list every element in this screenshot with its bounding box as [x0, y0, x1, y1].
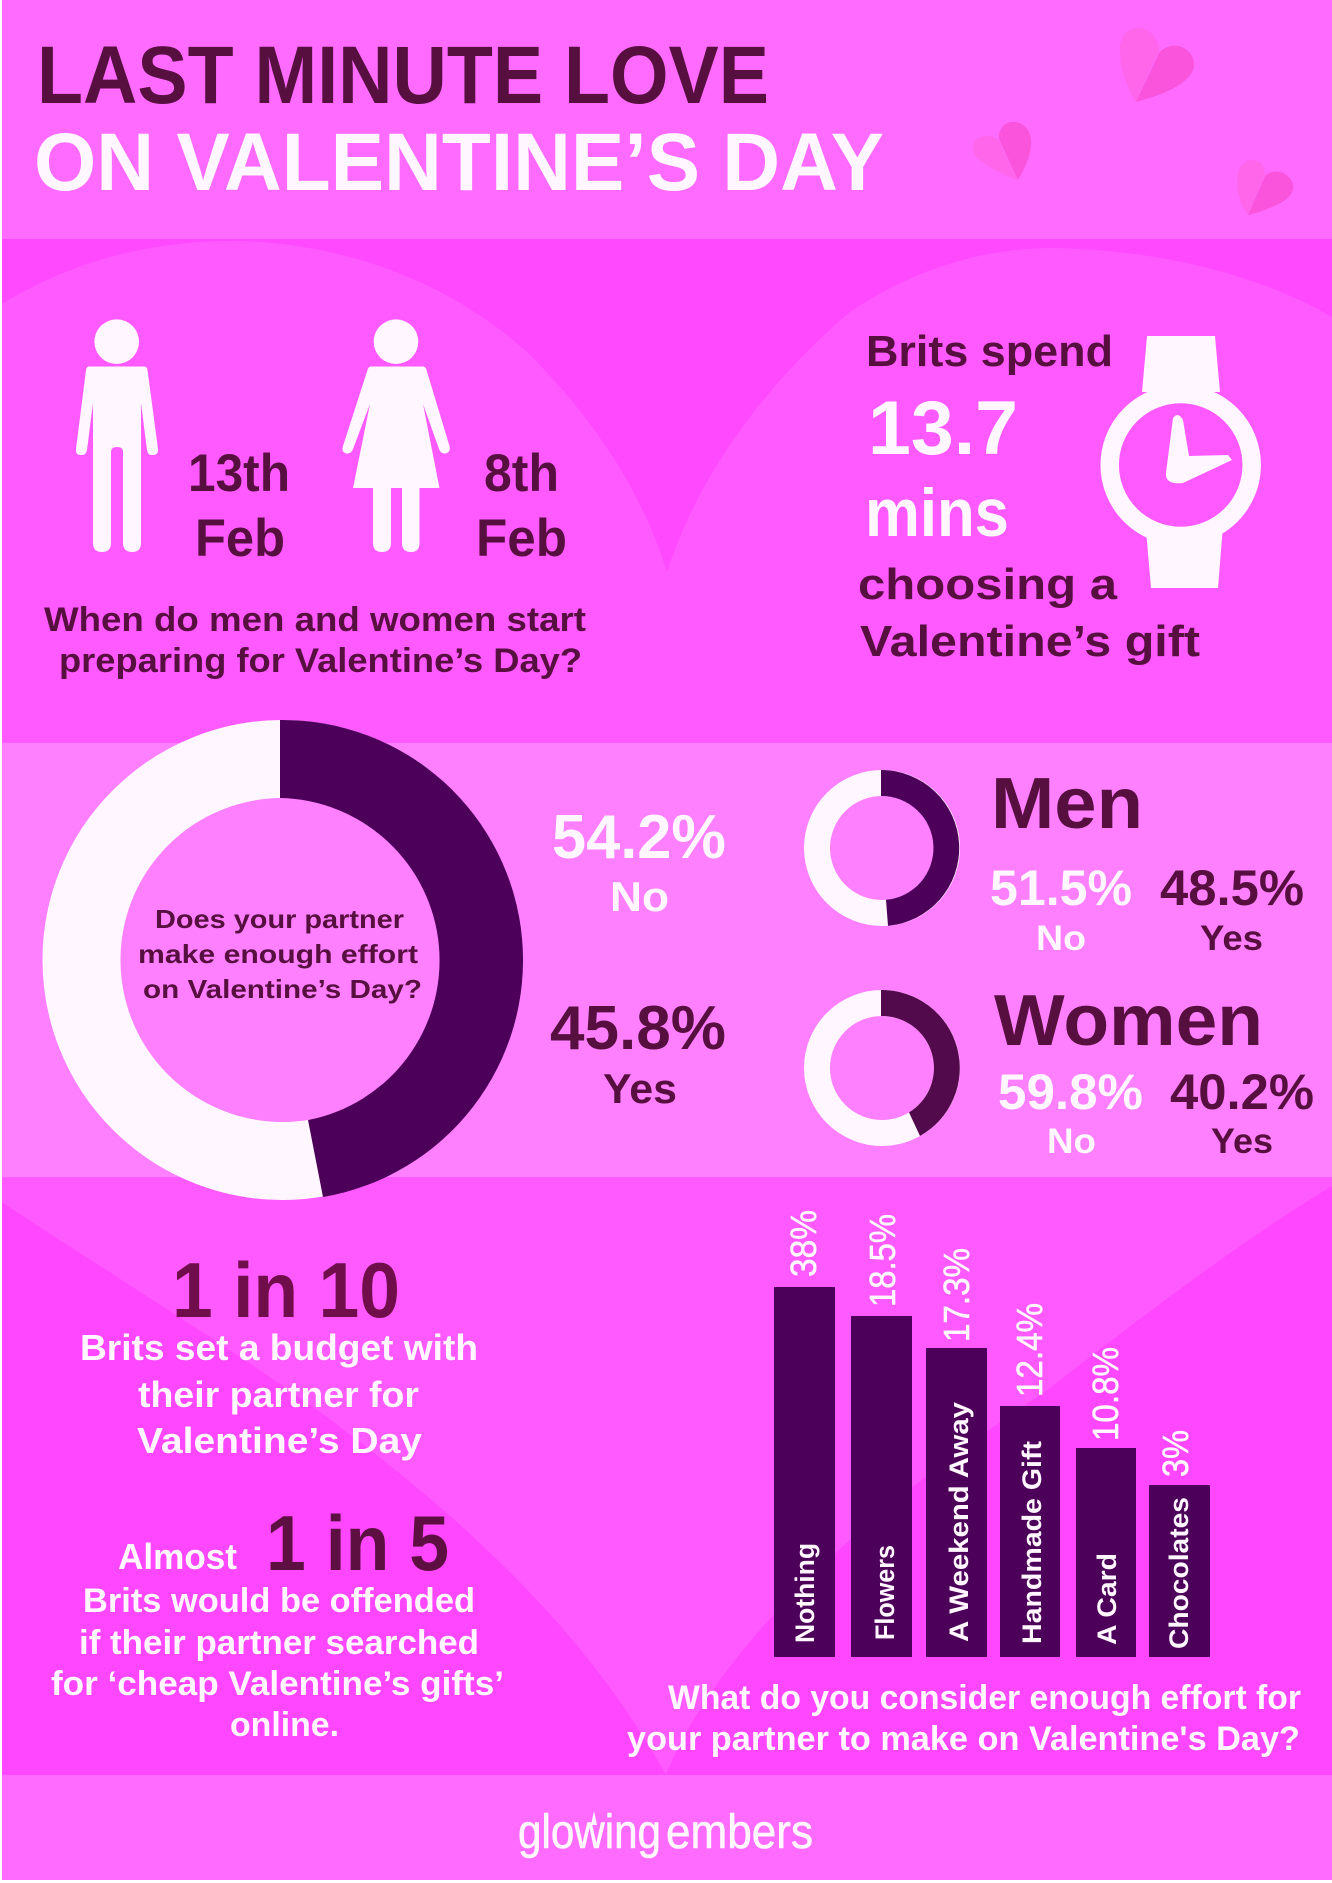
icon: large heart: [1120, 28, 1194, 102]
bar: a weekend away: [926, 1248, 987, 1657]
text: men date: Feb: [195, 509, 285, 568]
chart: overall donut: [82, 720, 523, 1197]
bar: flowers: Flowers: [870, 1545, 900, 1640]
logo: glowing embers: embers: [666, 1806, 813, 1859]
text: gift time statistic: 13.7: [868, 386, 1018, 471]
heading: on valentine's day: ON VALENTINE’S DAY: [34, 117, 884, 208]
panel: preparation and time: [0, 239, 1332, 743]
bar: chocolates: Chocolates: [1164, 1497, 1194, 1649]
text: preparation question: When do men and women start: [44, 601, 586, 639]
bar: flowers: 18.5%: [862, 1214, 903, 1307]
text: offended statistic: online.: [230, 1706, 339, 1744]
bar: flowers: [851, 1214, 912, 1657]
text: donut question: [138, 904, 422, 1004]
text: donut question: make enough effort: [138, 939, 418, 969]
bar: a card: 10.8%: [1085, 1347, 1126, 1441]
text: overall yes: Yes: [603, 1065, 677, 1112]
text: women breakdown: Yes: [1211, 1122, 1273, 1161]
text: budget statistic: 1 in 10: [172, 1246, 400, 1334]
icon: left heart: [973, 122, 1031, 180]
text: overall no: No: [610, 873, 669, 920]
text: offended statistic: for ‘cheap Valentine’s gifts’: [51, 1665, 504, 1703]
text: gift time statistic: Brits spend: [866, 327, 1113, 376]
text: donut question: Does your partner: [155, 904, 404, 934]
bar: handmade gift: [1000, 1303, 1060, 1657]
icon: man figure: [76, 319, 158, 552]
text: donut question: on Valentine’s Day?: [143, 974, 422, 1004]
bar: chocolates: 3%: [1155, 1430, 1196, 1477]
text: chart question: What do you consider enough effort for: [668, 1679, 1301, 1717]
text: men date: [188, 444, 290, 568]
text: overall no: [552, 803, 726, 920]
text: offended statistic: 1 in 5: [266, 1499, 449, 1587]
icon: right heart: [1237, 160, 1293, 215]
text: women date: [476, 444, 567, 568]
text: gift time statistic: choosing a: [858, 560, 1118, 609]
logo: glowing embers: [518, 1806, 813, 1859]
text: preparation question: [44, 601, 586, 680]
icon: watch: [1110, 336, 1252, 588]
chart: effort bars: [774, 1210, 1210, 1657]
text: men breakdown: 48.5%: [1160, 860, 1304, 916]
text: gift time statistic: [858, 327, 1200, 666]
text: women date: Feb: [476, 509, 567, 568]
text: men breakdown: [990, 764, 1304, 958]
text: offended statistic: [51, 1499, 504, 1744]
bar: nothing: Nothing: [790, 1543, 820, 1643]
bar: a card: [1076, 1347, 1136, 1657]
text: offended statistic: if their partner searched: [79, 1624, 479, 1662]
logo: glowing embers: glowing: [518, 1806, 661, 1859]
text: women date: 8th: [484, 444, 559, 503]
chart: women donut: [817, 990, 960, 1136]
bar: chocolates: [1149, 1430, 1210, 1657]
bar: nothing: [774, 1210, 835, 1657]
bar: handmade gift: 12.4%: [1009, 1303, 1050, 1397]
text: budget statistic: [80, 1246, 478, 1461]
panel: partner effort: [0, 720, 1332, 1197]
text: offended statistic: Almost: [118, 1536, 237, 1577]
panel: budgets and effort: [0, 1177, 1332, 1775]
text: budget statistic: their partner for: [138, 1374, 419, 1415]
text: overall yes: [550, 994, 726, 1112]
text: women breakdown: No: [1047, 1122, 1096, 1161]
panel: title band: [0, 0, 1332, 239]
text: men breakdown: No: [1036, 919, 1086, 958]
chart: men donut: [817, 770, 959, 926]
text: budget statistic: Brits set a budget with: [80, 1327, 478, 1368]
bar: a weekend away: 17.3%: [936, 1248, 977, 1342]
panel: footer: [0, 1775, 1332, 1880]
text: gift time statistic: mins: [865, 475, 1009, 551]
text: women breakdown: 40.2%: [1170, 1064, 1314, 1120]
icon: woman figure: [342, 319, 450, 552]
text: men breakdown: Yes: [1200, 919, 1263, 958]
text: overall no: 54.2%: [552, 803, 726, 872]
text: offended statistic: Brits would be offended: [83, 1582, 475, 1620]
bar: handmade gift: Handmade Gift: [1017, 1441, 1047, 1644]
text: preparation question: preparing for Valentine’s Day?: [59, 642, 582, 680]
text: men date: 13th: [188, 444, 290, 503]
text: women breakdown: 59.8%: [998, 1064, 1143, 1120]
bar: a weekend away: A Weekend Away: [944, 1402, 974, 1642]
text: men breakdown: 51.5%: [990, 860, 1132, 916]
bar: nothing: 38%: [783, 1210, 824, 1277]
text: women breakdown: Women: [994, 981, 1263, 1061]
text: chart question: [627, 1679, 1301, 1758]
text: budget statistic: Valentine’s Day: [137, 1420, 422, 1461]
text: gift time statistic: Valentine’s gift: [860, 617, 1200, 666]
text: women breakdown: [994, 981, 1314, 1161]
text: chart question: your partner to make on Valentine's Day?: [627, 1720, 1300, 1758]
heading: last minute love: LAST MINUTE LOVE: [37, 30, 769, 121]
text: men breakdown: Men: [991, 764, 1143, 844]
text: overall yes: 45.8%: [550, 994, 726, 1063]
bar: a card: A Card: [1092, 1553, 1122, 1645]
